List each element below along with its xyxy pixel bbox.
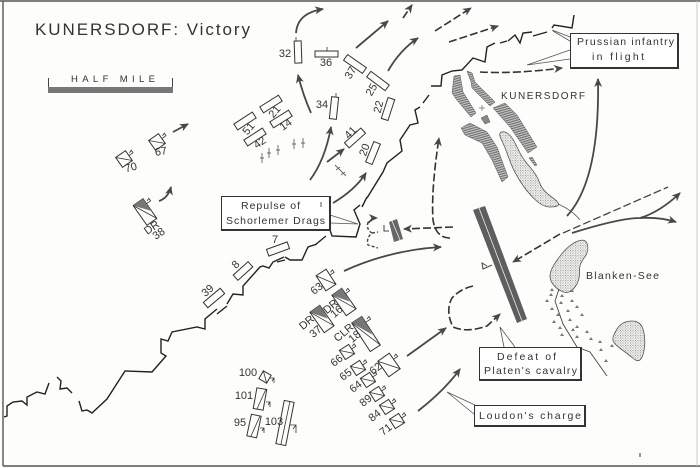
page mark: [639, 453, 641, 457]
callout: Prussian infantry in flight: [527, 30, 678, 68]
unit 36: [315, 47, 338, 69]
cuirassier unit CLR 18: 18: [346, 328, 364, 346]
cavalry unit 63: [308, 266, 340, 297]
unit 20: [357, 141, 380, 165]
unit 36: 36: [320, 57, 332, 69]
cavalry unit 95: [234, 414, 264, 438]
unit 32: 32: [279, 48, 291, 60]
cavalry unit 63: 63: [308, 281, 326, 297]
retreat arrows (dashed): [368, 5, 668, 330]
cavalry unit 103: [265, 400, 296, 446]
cavalry unit 64: [347, 370, 380, 395]
unit 8: [230, 259, 253, 280]
callout: Repulse of Schorlemer Drags: Repulse of: [241, 200, 300, 212]
cavalry unit 95: 95: [234, 417, 246, 429]
cavalry unit 65: 65: [337, 367, 355, 383]
cavalry unit 89: 89: [357, 393, 375, 409]
unit 51: 51: [240, 120, 258, 138]
unit 25: [364, 71, 389, 98]
unit 32: [279, 37, 302, 63]
cavalry unit 62: 62: [367, 361, 385, 377]
unit 7: [266, 234, 290, 256]
cavalry unit 103: 103: [265, 416, 283, 428]
unit 41: [342, 124, 366, 148]
unit 22: 22: [372, 100, 386, 114]
cavalry unit 84: [366, 397, 399, 424]
unit 21: 21: [266, 103, 284, 121]
cavalry unit 70: [116, 148, 138, 175]
village label: KUNERSDORF: [501, 91, 585, 102]
cavalry unit 70: 70: [124, 161, 138, 175]
unit 34: [316, 93, 339, 119]
cavalry unit 100: [239, 367, 274, 383]
cavalry unit 65: [337, 358, 370, 383]
callout: Repulse of Schorlemer Drags: Schorlemer Drags: [226, 215, 325, 227]
marsh tufts: [545, 288, 614, 362]
unit 14: 14: [278, 117, 294, 133]
callout: Prussian infantry in flight: Prussian infantry: [577, 36, 675, 48]
dragoon unit DR 37: DR: [297, 313, 317, 333]
callout: Defeat of Platen's cavalry: [479, 327, 581, 380]
dragoon unit DR 16: [321, 285, 360, 321]
cuirassier unit CLR 18: [332, 313, 385, 352]
cavalry unit 66: [328, 342, 359, 369]
callout: Loudon's charge: [447, 392, 585, 426]
callout: Loudon's charge: Loudon's charge: [479, 410, 581, 422]
scale bar: half mile: [48, 74, 173, 93]
callout: Prussian infantry in flight: in flight: [592, 51, 644, 63]
Schorlemer dragoons unit: [384, 219, 403, 242]
Prussian front line: [4, 15, 574, 417]
Blanken-See label: Blanken-See: [586, 270, 659, 282]
unit 37: 37: [343, 65, 359, 81]
village of Kunersdorf: [452, 71, 537, 182]
unit 21: [260, 95, 284, 121]
unit 34: 34: [316, 99, 328, 111]
unit 25: 25: [364, 82, 380, 98]
unit 42: [244, 128, 268, 151]
cavalry unit 67: 67: [154, 145, 168, 159]
callout: Defeat of Platen's cavalry: Defeat of: [497, 351, 556, 363]
unit 22: [372, 97, 395, 121]
cavalry unit 101: [235, 388, 270, 410]
unit 42: 42: [252, 135, 268, 151]
cavalry unit 89: [357, 384, 389, 409]
unit 39: [199, 282, 225, 308]
unit 37: [343, 55, 366, 81]
dragoon unit DR 38: DR: [142, 218, 162, 237]
stream through marsh: [555, 289, 607, 376]
dragoon unit DR 38: 38: [151, 226, 167, 242]
scale bar: half mile: HALF MILE: [71, 74, 155, 85]
callout: Repulse of Schorlemer Drags: [221, 196, 358, 230]
central cavalry line (Platen): [473, 206, 527, 323]
cavalry unit 66: 66: [328, 353, 346, 369]
unit 14: [270, 110, 294, 133]
skirmisher marks: [260, 138, 346, 176]
unit 51: [234, 112, 258, 138]
unit 20: 20: [357, 142, 373, 158]
dragoon unit DR 37: [297, 305, 334, 341]
cuirassier unit CLR 18: CLR: [332, 321, 356, 345]
cavalry unit 67: [149, 131, 169, 159]
unit 41: 41: [342, 124, 360, 142]
unit 39: 39: [199, 282, 217, 300]
Blanken-See lake: [550, 240, 588, 292]
cavalry unit 84: 84: [366, 408, 384, 424]
advance arrows: [159, 9, 680, 411]
unit 7: 7: [272, 234, 278, 246]
cavalry unit 71: [377, 411, 409, 438]
dragoon unit DR 38: [133, 196, 167, 242]
dragoon unit DR 37: 37: [307, 323, 325, 341]
title: KUNERSDORF: Victory: [35, 20, 250, 39]
cavalry unit 62: [367, 350, 404, 377]
unit 8: 8: [230, 259, 242, 271]
cavalry unit 64: 64: [347, 379, 365, 395]
cavalry unit 100: 100: [239, 367, 257, 379]
dragoon unit DR 16: DR: [321, 297, 341, 317]
lake by Kunersdorf: [500, 132, 559, 207]
second small lake: [613, 321, 645, 361]
stream from lake: [558, 204, 580, 220]
dragoon unit DR 16: 16: [328, 303, 346, 321]
callout: Defeat of Platen's cavalry: Platen's cavalry: [484, 365, 578, 377]
cavalry unit 101: 101: [235, 390, 253, 402]
cavalry unit 71: 71: [377, 422, 395, 438]
